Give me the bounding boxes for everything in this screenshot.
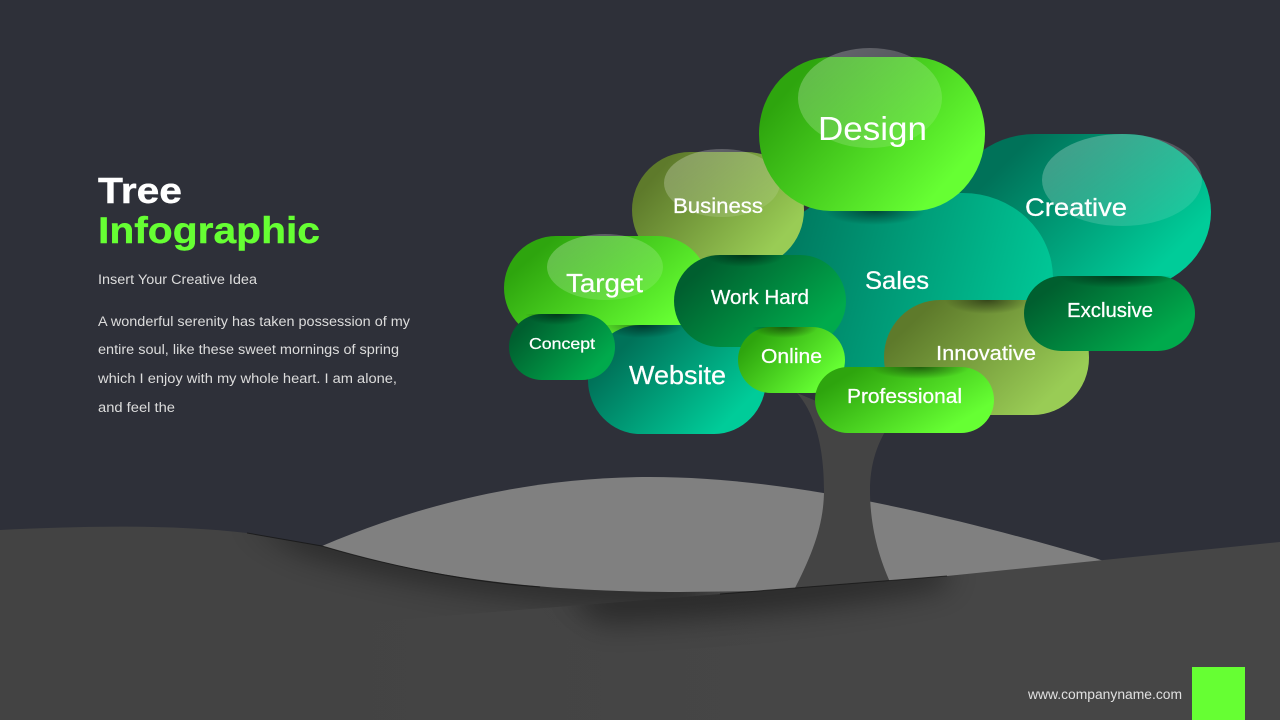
body text: and feel the [98,400,175,415]
title: Infographic [98,210,320,251]
body text [97,314,410,415]
label: online: Online [761,346,822,368]
bubble: design [759,48,985,211]
website url: www.companyname.com [1027,687,1182,702]
left hill shadow [274,538,702,607]
bubble: online [738,327,845,393]
bubble: target [504,234,709,340]
label: design: Design [818,110,927,147]
tree canopy [504,48,1211,434]
bubble: innovative [884,300,1089,415]
bubble: work hard [674,255,846,347]
foreground hills [0,520,1280,720]
label: business: Business [673,194,763,218]
bubble: business [632,149,804,268]
label: website: Website [629,360,726,390]
left foreground hill [0,527,850,720]
title: Tree [98,170,182,211]
bubble: exclusive [1024,276,1195,351]
label: work hard: Work Hard [711,287,809,309]
back hill [322,477,1112,640]
body text: A wonderful serenity has taken possession of my [98,314,410,329]
bubble: professional [815,367,994,433]
subtitle: Insert Your Creative Idea [98,272,258,287]
label: professional: Professional [847,386,962,408]
bubble: creative [950,134,1211,290]
right hill edge line [720,576,947,594]
tree trunk [794,393,890,590]
label: concept: Concept [529,336,596,353]
bubble: concept [509,314,615,380]
title [98,170,320,251]
label: creative: Creative [1025,194,1127,222]
bubble: sales [770,193,1053,403]
label: innovative: Innovative [936,342,1036,365]
label: sales: Sales [865,267,929,295]
label: exclusive: Exclusive [1067,300,1153,322]
left hill edge line [247,533,540,587]
accent square [1192,667,1245,720]
label: target: Target [566,268,644,298]
design shadow [825,211,925,225]
right foreground hill [330,542,1280,720]
body text: which I enjoy with my whole heart. I am alone, [97,371,397,386]
right hill shadow [574,576,949,630]
bubble: website [588,325,766,434]
body text: entire soul, like these sweet mornings of spring [98,342,399,357]
